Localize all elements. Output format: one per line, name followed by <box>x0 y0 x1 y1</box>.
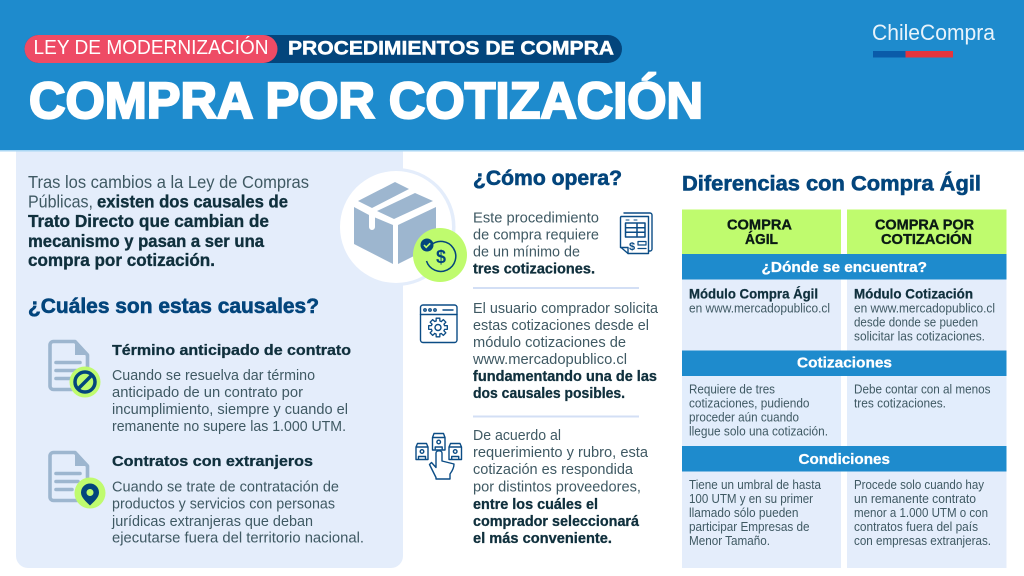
text: término anticipado de contrato <box>112 343 351 435</box>
step 3 text: requerimiento y rubro, esta <box>473 445 649 461</box>
item: término anticipado <box>50 342 351 435</box>
row band: cotizaciones: Cotizaciones <box>797 354 892 372</box>
title: COMPRA POR COTIZACIÓN <box>29 72 703 129</box>
step 3 text: comprador seleccionará <box>473 514 640 530</box>
column header: compra por cotización: COMPRA POR <box>875 216 974 234</box>
step 2 text <box>472 301 659 402</box>
icon: browser settings window <box>420 305 457 342</box>
step 3 text <box>473 428 649 547</box>
cell: condiciones compra por cotización: un remanente contrato <box>854 491 976 506</box>
icon: document with prohibited sign <box>50 342 100 398</box>
cell: condiciones compra ágil <box>682 472 841 568</box>
step 3 text: cotización es respondida <box>473 462 634 478</box>
item: contratos con extranjeros <box>50 452 364 546</box>
step 2 text: fundamentando una de las <box>473 369 657 385</box>
cell: cotizaciones compra ágil: Requiere de tres <box>689 381 775 396</box>
divider <box>473 416 639 418</box>
cell: condiciones compra por cotización: Procede solo cuando hay <box>854 477 984 492</box>
text: término anticipado de contrato: Término anticipado de contrato <box>112 343 351 359</box>
column header: compra ágil: COMPRA <box>727 216 792 234</box>
step 1 text <box>473 211 599 278</box>
cell: módulo compra ágil: Módulo Compra Ágil <box>689 286 818 302</box>
icon: package with dollar badge <box>338 168 467 286</box>
divider <box>473 287 639 289</box>
cell: condiciones compra por cotización: menor a 1.000 UTM o con <box>854 505 988 520</box>
intro text: Trato Directo que cambian de <box>28 211 269 231</box>
text: contratos con extranjeros <box>111 454 364 546</box>
intro text: Tras los cambios a la Ley de Compras <box>28 172 309 192</box>
icon: package with dollar badge: $ <box>436 247 446 267</box>
text: contratos con extranjeros: ejecutarse fuera del territorio nacional. <box>112 530 364 546</box>
intro text <box>28 172 309 270</box>
intro text: Públicas, <box>28 192 93 212</box>
step 1 text: de un mínimo de <box>473 245 580 261</box>
text: contratos con extranjeros: productos y servicios con personas <box>112 496 335 512</box>
cell: condiciones compra ágil: 100 UTM y en su primer <box>689 491 814 506</box>
tag: ley de modernización: LEY DE MODERNIZACIÓN <box>34 36 268 59</box>
heading: cómo opera: ¿Cómo opera? <box>473 166 622 190</box>
cell: módulo compra ágil <box>682 280 841 350</box>
cell: condiciones compra por cotización: contratos fuera del país <box>854 519 978 534</box>
step 2 text: El usuario comprador solicita <box>473 301 659 317</box>
row band: cotizaciones <box>682 350 1006 376</box>
logo: ChileCompra: ChileCompra <box>872 20 996 45</box>
intro text: existen dos causales de <box>97 192 288 212</box>
text: término anticipado de contrato: Cuando se resuelva dar término <box>112 368 315 384</box>
step 2 text: módulo cotizaciones de <box>473 335 626 351</box>
section: cómo opera <box>416 166 659 547</box>
comparison table <box>682 210 1006 568</box>
text: contratos con extranjeros: jurídicas extranjeras que deban <box>111 514 313 530</box>
text: término anticipado de contrato: anticipado de un contrato por <box>112 385 303 401</box>
text: término anticipado de contrato: incumplimiento, siempre y cuando el <box>112 402 348 418</box>
intro text: mecanismo y pasan a ser una <box>28 231 264 251</box>
step 3 text: el más conveniente. <box>473 531 612 547</box>
icon: hand choosing suppliers <box>416 434 462 479</box>
panel: causales <box>16 152 403 568</box>
cell: módulo cotización <box>847 280 1006 350</box>
cell: cotizaciones compra por cotización: Debe contar con al menos <box>854 381 990 396</box>
step 1 text: tres cotizaciones. <box>473 262 595 278</box>
text: contratos con extranjeros: Contratos con extranjeros <box>112 454 313 470</box>
heading: diferencias con compra ágil: Diferencias con Compra Ágil <box>682 171 981 196</box>
header band <box>0 0 1024 152</box>
icon: document with map pin <box>50 452 106 508</box>
cell: módulo cotización: Módulo Cotización <box>854 286 973 302</box>
text: contratos con extranjeros: Cuando se trate de contratación de <box>112 480 339 496</box>
cell: cotizaciones compra ágil: cotizaciones, pudiendo <box>689 396 810 410</box>
tag: procedimientos de compra: PROCEDIMIENTOS DE COMPRA <box>288 38 614 60</box>
step 2 text: www.mercadopublico.cl <box>472 352 627 368</box>
intro text: compra por cotización. <box>28 250 215 270</box>
step 3 text: entre los cuáles el <box>473 497 598 513</box>
step 3 text: por distintos proveedores, <box>473 480 641 496</box>
cell: cotizaciones compra ágil: proceder aún cuando <box>689 409 799 424</box>
column header: compra ágil <box>682 210 841 254</box>
cell: módulo cotización: en www.mercadopublico.cl <box>854 301 995 316</box>
text: término anticipado de contrato: remanente no supere las 1.000 UTM. <box>112 419 346 435</box>
icon: quote document <box>620 213 652 254</box>
icon: quote document: $ <box>629 241 635 253</box>
cell: condiciones compra por cotización: con empresas extranjeras. <box>854 533 991 548</box>
cell: cotizaciones compra ágil: llegue solo una cotización. <box>689 423 828 438</box>
cell: cotizaciones compra por cotización <box>847 376 1006 446</box>
cell: cotizaciones compra ágil <box>682 376 841 446</box>
cell: módulo cotización: desde donde se pueden <box>854 315 978 330</box>
cell: módulo compra ágil: en www.mercadopublico.cl <box>689 301 830 316</box>
cell: condiciones compra ágil: participar Empresas de <box>689 519 810 534</box>
row band: condiciones <box>682 446 1006 472</box>
cell: condiciones compra ágil: Menor Tamaño. <box>689 533 770 548</box>
step 2 text: estas cotizaciones desde el <box>473 318 649 334</box>
row band: dónde se encuentra <box>682 254 1006 280</box>
cell: cotizaciones compra por cotización: tres cotizaciones. <box>854 396 946 410</box>
cell: condiciones compra por cotización <box>847 472 1006 568</box>
cell: condiciones compra ágil: llamado sólo pueden <box>689 505 798 520</box>
cell: módulo cotización: solicitar las cotizaciones. <box>854 329 985 344</box>
step 3 text: De acuerdo al <box>473 428 561 444</box>
step 1 text: Este procedimiento <box>473 211 599 227</box>
cell: condiciones compra ágil: Tiene un umbral de hasta <box>689 477 822 492</box>
row band: condiciones: Condiciones <box>798 451 890 468</box>
row band: dónde se encuentra: ¿Dónde se encuentra? <box>762 259 927 276</box>
tag: procedimientos de compra <box>24 35 622 63</box>
column header: compra por cotización: COTIZACIÓN <box>881 230 972 248</box>
step 2 text: dos causales posibles. <box>473 386 625 402</box>
column header: compra por cotización <box>847 210 1006 254</box>
heading: cuáles son estas causales: ¿Cuáles son estas causales? <box>28 294 319 318</box>
column header: compra ágil: ÁGIL <box>745 231 778 248</box>
logo: ChileCompra <box>872 20 996 58</box>
step 1 text: de compra requiere <box>473 228 599 244</box>
